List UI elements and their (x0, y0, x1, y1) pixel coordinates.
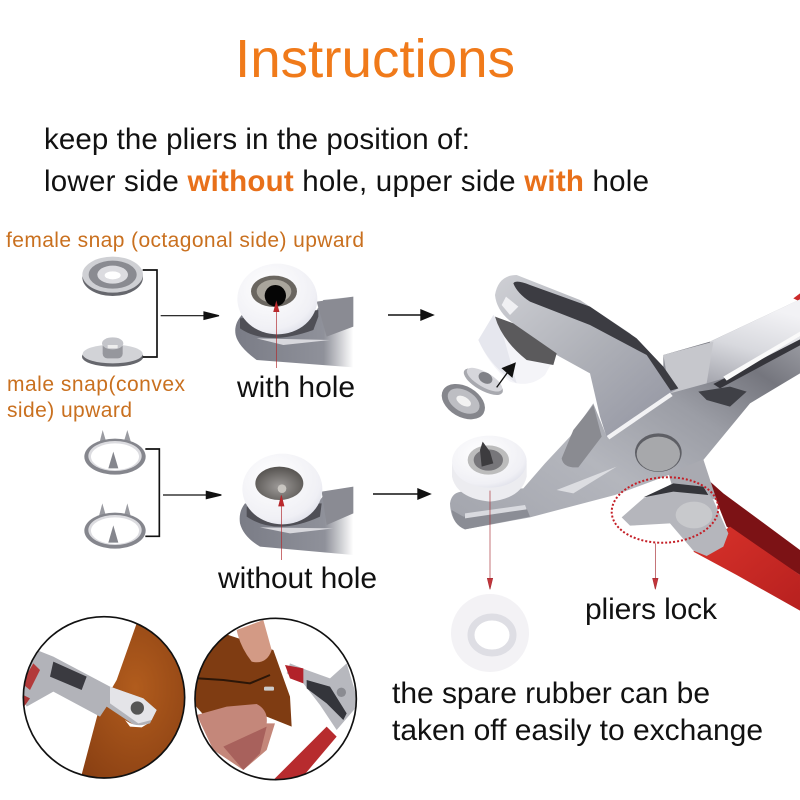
icon: female snap (82, 257, 143, 296)
icon: without hole roller (240, 454, 353, 555)
label: with hole: with hole (236, 371, 355, 404)
arrow: roller down (487, 491, 493, 589)
arrow: bottom snaps to roller (163, 491, 221, 499)
note: spare rubber (392, 677, 763, 747)
arrow: snaps to upper roller (497, 363, 515, 387)
title: Instructions (235, 29, 515, 89)
callout ring: lock (610, 475, 720, 545)
pliers lock lever (622, 483, 728, 556)
label: female snap: female snap (octagonal side) upward (6, 229, 364, 252)
arrow: without hole pointer (279, 495, 284, 560)
instruction text: lower side without hole, upper side with hole (44, 165, 649, 198)
upper jaw of pliers (495, 275, 678, 439)
arrow: roller to pliers top (388, 310, 433, 320)
icon: open prong lower (84, 503, 146, 549)
round photos (20, 613, 362, 783)
icon: open prong upper (84, 430, 146, 475)
photo: pliers on leather (20, 613, 190, 783)
icon: female snap on pliers (435, 377, 491, 427)
pliers illustration (435, 275, 800, 611)
lower roller (452, 436, 527, 502)
bracket: top snaps (143, 270, 157, 357)
icon: male snap (82, 337, 143, 367)
rivet (635, 433, 682, 472)
arrow: with hole pointer (274, 302, 279, 368)
bracket: bottom snaps (145, 449, 159, 536)
arrow: top snaps to roller (161, 312, 219, 319)
arrow: roller to pliers bottom (373, 489, 430, 499)
icon: male snap on pliers (460, 362, 507, 400)
note: spare rubber: taken off easily to exchange (392, 714, 763, 747)
label: male snap (7, 373, 186, 422)
label: pliers lock: pliers lock (585, 593, 718, 626)
lower arm of pliers (450, 299, 800, 529)
note: spare rubber: the spare rubber can be (392, 677, 710, 710)
label: male snap: male snap(convex (7, 373, 186, 396)
icon: spare rubber (451, 594, 529, 672)
snaps and rollers diagram (82, 257, 353, 560)
instruction text (44, 123, 649, 198)
upper roller (478, 315, 557, 384)
arrow: lock down (653, 543, 658, 589)
icon: with hole roller (235, 264, 353, 367)
label: without hole: without hole (217, 562, 377, 595)
label: male snap: side) upward (7, 399, 132, 422)
photo: hands holding leather (192, 617, 362, 783)
red handle (693, 293, 800, 611)
instruction text: keep the pliers in the position of: (44, 123, 470, 156)
